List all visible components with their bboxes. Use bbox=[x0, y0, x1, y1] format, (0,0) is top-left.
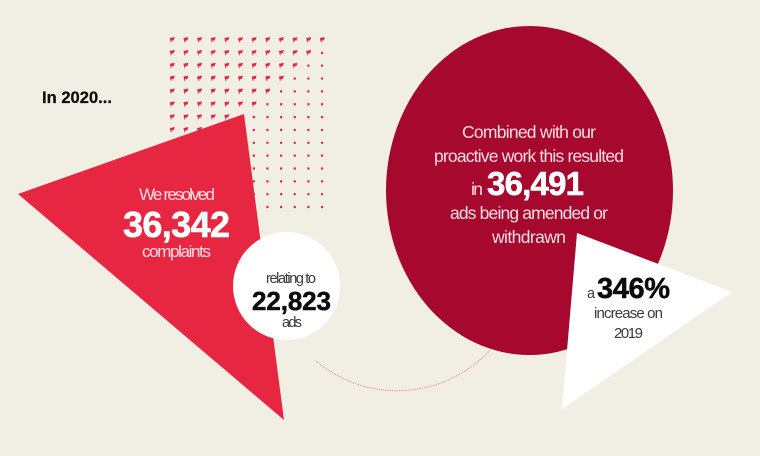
panel: red triangle complaints: 36,342 bbox=[123, 204, 230, 245]
panel: white triangle increase: 346% bbox=[597, 273, 670, 305]
panel: white triangle increase bbox=[562, 233, 732, 409]
panel: dark red circle ads amended: proactive work this resulted bbox=[434, 146, 624, 166]
panel: white triangle increase: 2019 bbox=[614, 325, 643, 342]
panel: white circle ads: ads bbox=[282, 315, 302, 331]
dotted connector arc bbox=[316, 350, 490, 391]
dot pattern: flag markers bbox=[170, 37, 325, 133]
dot pattern: round dots bbox=[253, 52, 323, 208]
panel: white circle ads: relating to bbox=[266, 271, 316, 287]
panel: white triangle increase: a bbox=[587, 286, 596, 302]
panel: white circle ads bbox=[233, 232, 340, 340]
panel: dark red circle ads amended: withdrawn bbox=[491, 227, 566, 247]
panel: red triangle complaints bbox=[18, 114, 284, 420]
panel: red triangle complaints: complaints bbox=[142, 242, 211, 261]
panel: dark red circle ads amended: Combined with our bbox=[462, 122, 596, 142]
panel: dark red circle ads amended: ads being amended or bbox=[450, 203, 608, 223]
panel: dark red circle ads amended: 36,491 bbox=[487, 165, 584, 202]
panel: dark red circle ads amended: in bbox=[471, 179, 483, 199]
panel: red triangle complaints: We resolved bbox=[139, 185, 215, 204]
panel: white circle ads: 22,823 bbox=[252, 286, 331, 316]
heading: In 2020: In 2020... bbox=[42, 89, 112, 107]
panel: dark red circle ads amended bbox=[386, 26, 673, 355]
panel: white triangle increase: increase on bbox=[594, 305, 663, 322]
